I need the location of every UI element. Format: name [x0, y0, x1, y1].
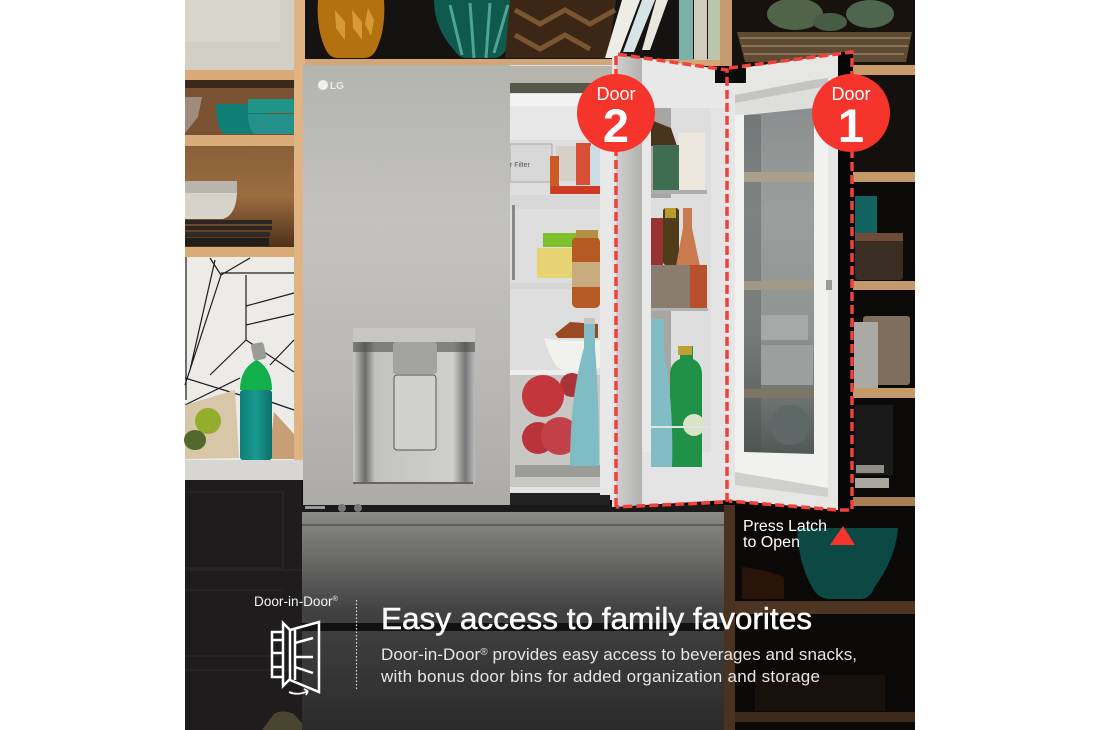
description: with bonus door bins for added organization and storage: [380, 667, 820, 686]
door-in-door icon label: Door-in-Door: [254, 594, 333, 609]
dotted divider: [356, 600, 358, 690]
green water bottle and produce bag: [184, 342, 294, 460]
door-in-door icon label: ®: [333, 595, 339, 603]
description: [380, 645, 857, 686]
interior of fridge: r Filter: [510, 162, 530, 169]
right shelving: [853, 65, 915, 506]
door 1 open: [727, 52, 853, 510]
description: Door-in-Door: [381, 645, 480, 664]
badge: door 2: Door: [596, 84, 636, 104]
latch arrow: [830, 526, 855, 545]
interior food items: [522, 143, 600, 466]
badge: door 1: 1: [838, 99, 864, 152]
interior of fridge: [510, 65, 620, 505]
background: left shelving: [185, 0, 915, 730]
basket top right: [732, 0, 915, 65]
badge: door 1: [812, 74, 890, 152]
icon: door in door: [272, 622, 319, 695]
red dashed outline: door 2: [616, 54, 727, 507]
tile pattern: [185, 257, 294, 410]
press latch label: [743, 518, 827, 551]
hinge: [715, 68, 746, 83]
description: provides easy access to beverages and snacks,: [488, 645, 857, 664]
lower right shelving: [724, 505, 915, 730]
counter and lower cabinet: [185, 460, 306, 730]
press latch label: Press Latch: [743, 518, 827, 535]
badge: door 2: 2: [603, 99, 629, 152]
bowls on left shelf: [185, 97, 294, 246]
left fridge door: LG: [330, 81, 344, 92]
description: ®: [480, 647, 488, 658]
left fridge door: [303, 65, 510, 505]
bottom drawer: [302, 504, 724, 730]
badge: door 2: [577, 74, 655, 152]
top shelf objects: [305, 0, 725, 66]
press latch label: to Open: [743, 534, 800, 551]
badge: door 1: Door: [831, 84, 871, 104]
door 2 open: [600, 55, 727, 507]
red dashed outline: door 1: [729, 52, 852, 510]
heading: Easy access to family favorites: [381, 601, 812, 636]
books: [605, 0, 732, 66]
